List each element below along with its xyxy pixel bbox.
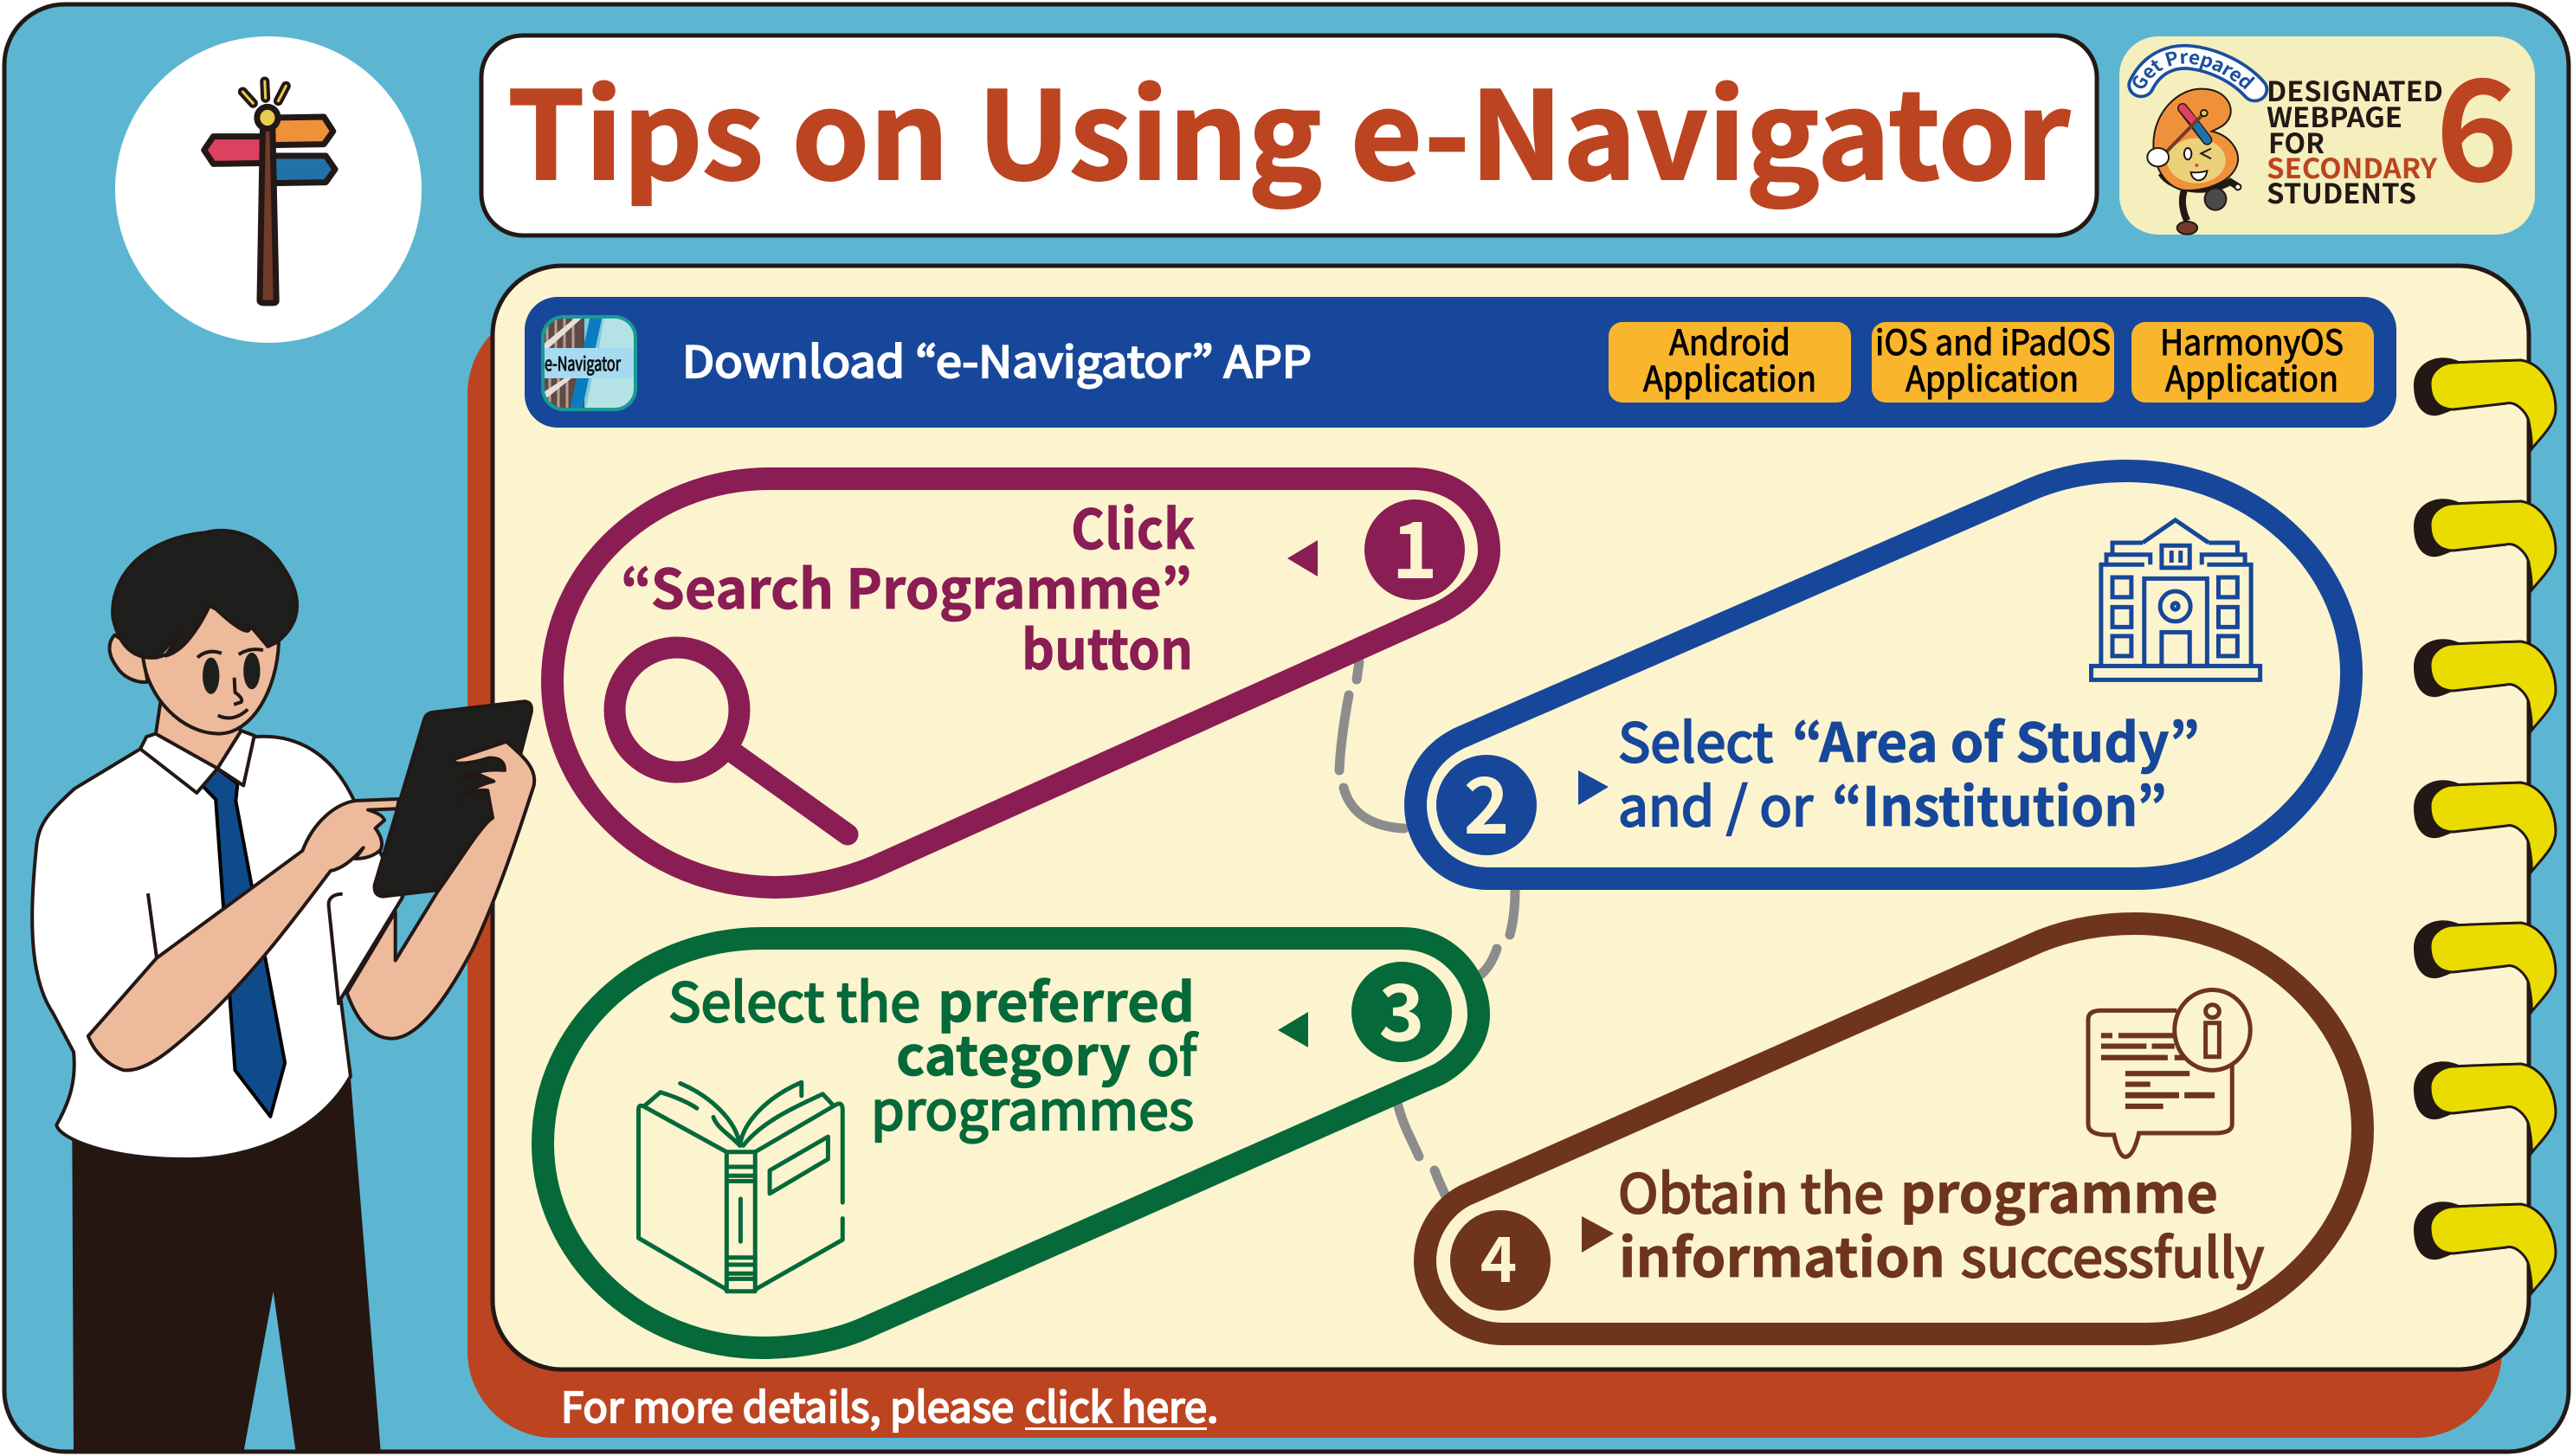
text: [668, 959, 1199, 1145]
step 1: [552, 479, 1489, 887]
number 1: [1364, 488, 1465, 601]
text: Obtain the: [1618, 1150, 1884, 1228]
trousers: [72, 1078, 381, 1453]
button: ios: [1872, 315, 2114, 403]
button: android: [1609, 315, 1851, 403]
text: “Search Programme”: [621, 546, 1192, 625]
shirt: [32, 737, 403, 1159]
button: harmony: Application: [2165, 351, 2338, 402]
dashed connectors: [1339, 662, 1515, 1203]
badge text: [2267, 70, 2443, 212]
ear: [110, 635, 147, 682]
text: button: [1022, 607, 1193, 686]
button: harmony: [2131, 315, 2374, 403]
button: android: Android: [1669, 315, 1790, 365]
icon: book: [639, 1082, 842, 1292]
text: category: [896, 1013, 1131, 1091]
icon: signpost in white circle: [115, 36, 422, 343]
number 3: 3: [1378, 950, 1425, 1063]
text: programme: [1900, 1150, 2218, 1228]
step 3: [543, 938, 1479, 1348]
badge text: DESIGNATED: [2267, 70, 2443, 110]
text: Click: [1071, 486, 1195, 565]
collar: [140, 734, 217, 793]
button: android: Application: [1643, 351, 1816, 402]
text: of: [1147, 1013, 1199, 1091]
step 4: [1425, 924, 2363, 1334]
button: ios: Application: [1906, 351, 2079, 402]
arrow: [1582, 1216, 1614, 1253]
text: [1618, 1150, 2264, 1292]
icon: app: e-Navigator: [545, 349, 621, 377]
footer text: For more details, please: [561, 1374, 1014, 1434]
heading: Download “e-Navigator” APP: [682, 328, 1312, 390]
badge text: FOR: [2268, 122, 2325, 162]
back panel: [468, 307, 2502, 1438]
badge text: SECONDARY: [2267, 147, 2437, 187]
tie: [203, 769, 285, 1117]
title box: [481, 35, 2097, 235]
binder tabs: [2414, 358, 2556, 1293]
text: and / or: [1618, 763, 1814, 841]
text: Select: [1618, 699, 1773, 777]
icon: mascot: Get Prepared: [2132, 52, 2255, 90]
arrow: [1287, 540, 1318, 577]
icon: mascot: [2127, 43, 2268, 235]
icon: institution building: [2092, 520, 2260, 680]
text: successfully: [1961, 1214, 2264, 1292]
title: Tips on Using e-Navigator: [507, 40, 2071, 215]
text: “Area of Study”: [1792, 699, 2200, 777]
pointing arm: [88, 799, 399, 1070]
number 2: 2: [1463, 744, 1510, 856]
number 3: [1351, 950, 1452, 1063]
face: [143, 606, 279, 734]
text: [1618, 699, 2200, 841]
number 4: [1450, 1209, 1551, 1311]
illustration: student with tablet: [32, 531, 534, 1453]
text: [621, 486, 1195, 686]
text: information: [1619, 1214, 1945, 1292]
text: programmes: [871, 1067, 1194, 1145]
tablet: [375, 701, 532, 897]
badge text: WEBPAGE: [2267, 96, 2402, 136]
icon: app: [541, 315, 637, 411]
text: preferred: [938, 959, 1195, 1037]
icon: magnifier: [615, 647, 848, 834]
number 1: 1: [1391, 488, 1438, 601]
badge number: 6: [2435, 18, 2518, 222]
step 2: [1415, 471, 2351, 879]
neck: [156, 703, 242, 769]
badge: designated webpage 6: [2119, 18, 2535, 235]
badge text: STUDENTS: [2267, 172, 2416, 212]
text: Select the: [668, 959, 920, 1037]
shirt folds: [148, 893, 343, 1005]
footer text: click here: [1025, 1374, 1207, 1434]
text: “Institution”: [1832, 763, 2167, 841]
button: ios: iOS and iPadOS: [1875, 315, 2111, 365]
notebook page: [493, 266, 2529, 1369]
download bar: [525, 297, 2396, 428]
icon: info bubble: [2088, 989, 2250, 1157]
hair: [113, 531, 297, 658]
number 4: 4: [1480, 1209, 1517, 1300]
arrow: [1578, 770, 1609, 805]
footer text: .: [1207, 1374, 1218, 1434]
facial features: [197, 649, 263, 718]
arm holding tablet: [347, 742, 534, 1039]
arrow: [1278, 1012, 1308, 1047]
button: harmony: HarmonyOS: [2160, 315, 2344, 365]
number 2: [1436, 744, 1537, 856]
